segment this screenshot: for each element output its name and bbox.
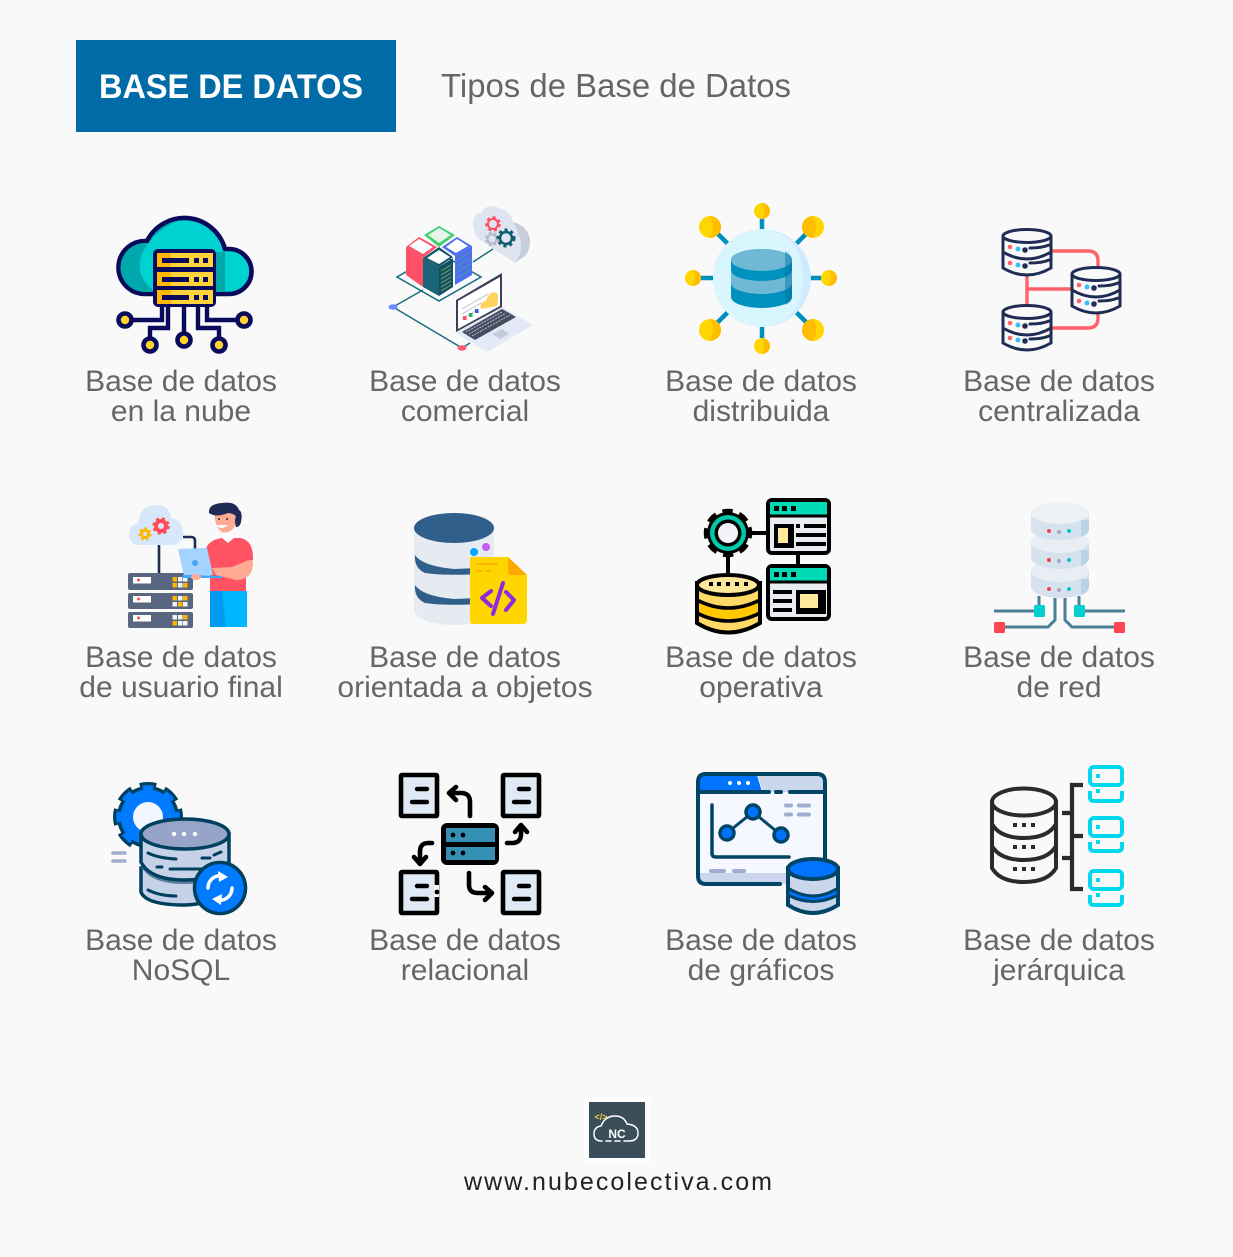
label: comercial: comercial [401, 395, 529, 428]
label: NoSQL [85, 924, 277, 987]
icon: end user database [128, 503, 253, 628]
header badge [76, 40, 396, 132]
label: de red: de red [1016, 671, 1102, 704]
label: de gráficos: Base de datos [665, 924, 857, 957]
label: operativa: operativa [699, 671, 823, 704]
label: comercial [369, 365, 561, 428]
label: de red [963, 641, 1155, 704]
logo: Nube Colectiva [584, 1097, 650, 1163]
logo: Nube Colectiva: </> [594, 1112, 608, 1122]
subtitle: Tipos de Base de Datos [441, 67, 791, 104]
icon: operational database [697, 500, 829, 632]
label: de gráficos [665, 924, 857, 987]
website url: www.nubecolectiva.com [463, 1168, 772, 1196]
label: centralizada [963, 365, 1155, 428]
icon: hierarchical database [992, 767, 1122, 905]
logo: Nube Colectiva: NC [608, 1127, 626, 1141]
label: centralizada: centralizada [978, 395, 1140, 428]
icon: graph database [698, 774, 838, 913]
label: en la nube [85, 365, 277, 428]
header badge: BASE DE DATOS [99, 68, 363, 106]
label: NoSQL: NoSQL [132, 954, 230, 987]
label: orientada a objetos: orientada a objetos [337, 671, 593, 704]
label: de gráficos: de gráficos [688, 954, 834, 987]
label: orientada a objetos [337, 641, 593, 704]
label: jerárquica: jerárquica [992, 954, 1125, 987]
label: relacional: Base de datos [369, 924, 561, 957]
label: relacional [369, 924, 561, 987]
label: distribuida: Base de datos [665, 365, 857, 398]
label: de usuario final: Base de datos [85, 641, 277, 674]
label: jerárquica: Base de datos [963, 924, 1155, 957]
label: de red: Base de datos [963, 641, 1155, 674]
label: comercial: Base de datos [369, 365, 561, 398]
icon: centralized database [1003, 230, 1120, 350]
label: distribuida: distribuida [693, 395, 830, 428]
icon: cloud database [118, 218, 252, 352]
icon: commercial isometric database [388, 206, 533, 352]
label: operativa: Base de datos [665, 641, 857, 674]
label: distribuida [665, 365, 857, 428]
icon: NoSQL database [113, 784, 246, 914]
icon: object oriented database [414, 513, 527, 625]
label: de usuario final: de usuario final [79, 671, 283, 704]
label: operativa [665, 641, 857, 704]
label: orientada a objetos: Base de datos [369, 641, 561, 674]
label: en la nube: en la nube [111, 395, 251, 428]
icon: distributed database [685, 203, 837, 354]
label: en la nube: Base de datos [85, 365, 277, 398]
label: centralizada: Base de datos [963, 365, 1155, 398]
label: NoSQL: Base de datos [85, 924, 277, 957]
icon: relational database [401, 775, 539, 913]
label: jerárquica [963, 924, 1155, 987]
label: relacional: relacional [401, 954, 529, 987]
label: de usuario final [79, 641, 283, 704]
icon: network database [994, 502, 1125, 633]
